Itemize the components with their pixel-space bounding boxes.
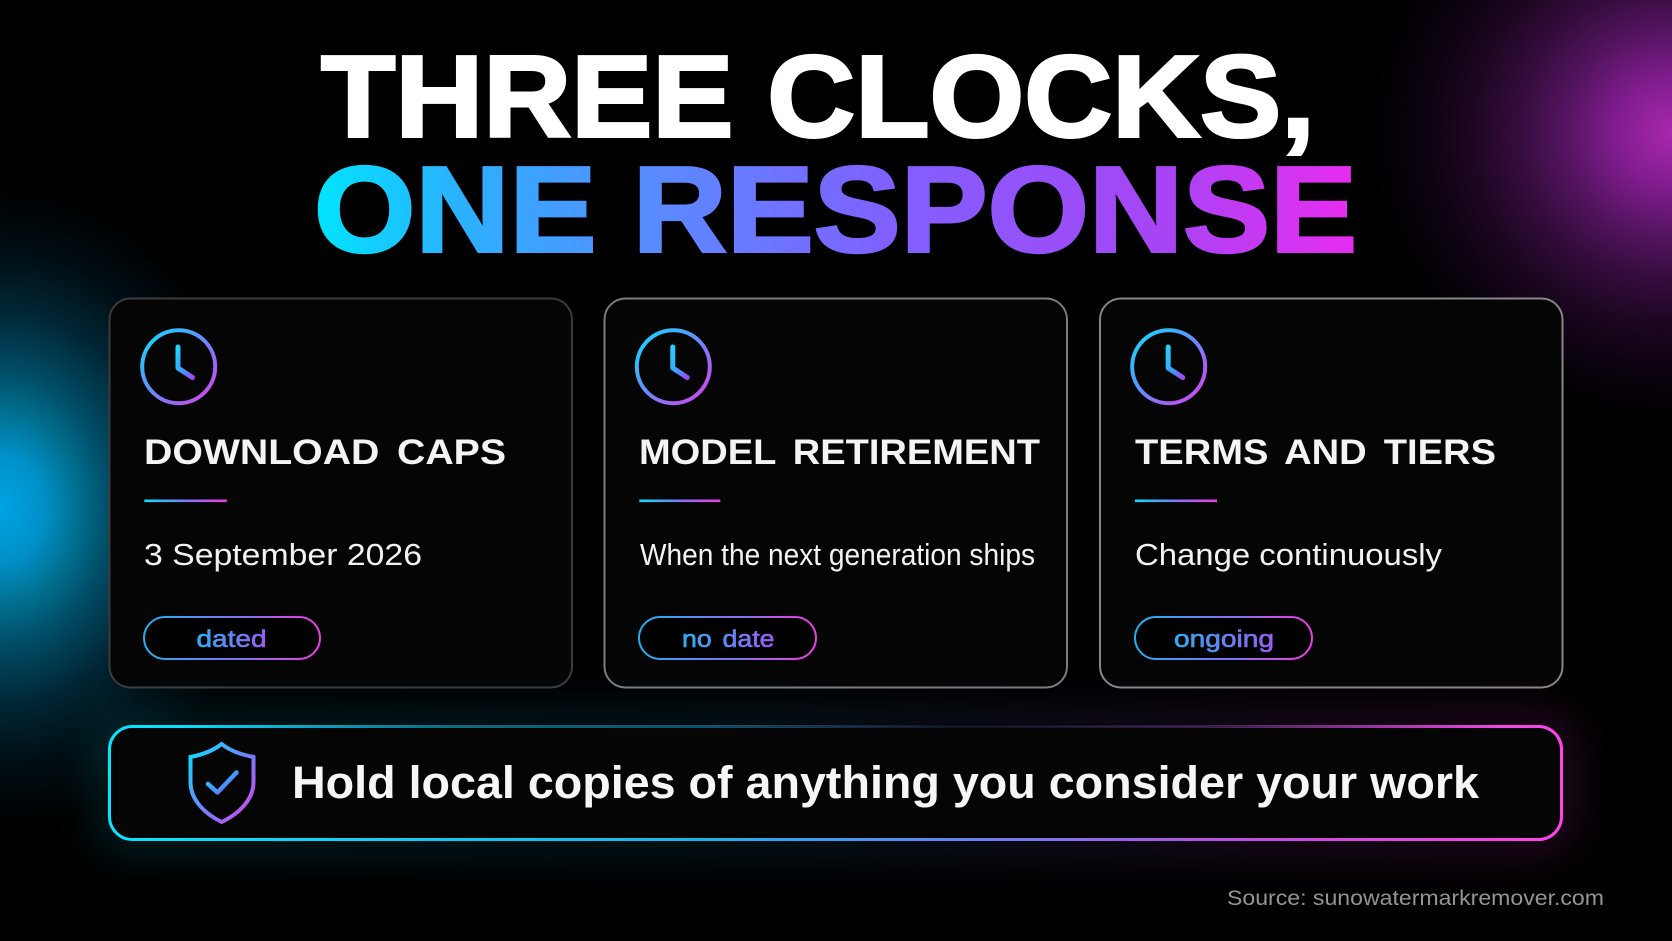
status pill: no date [639,617,816,659]
source note: Source: sunowatermarkremover.com [1227,887,1604,910]
panel: model retirement [604,298,1067,688]
title [314,32,1357,278]
icon: clock [1132,330,1205,403]
heading: TERMS AND TIERS [1135,433,1496,472]
panel: terms and tiers [1100,298,1562,688]
status pill: no date: no date [682,626,774,653]
icon: clock [637,330,710,403]
status pill: ongoing: ongoing [1174,626,1274,653]
status pill: dated [144,617,320,659]
callout text: Hold local copies of anything you consider your work [292,757,1480,808]
heading: DOWNLOAD CAPS [144,433,506,472]
divider [144,500,227,502]
heading: MODEL RETIREMENT [639,433,1040,472]
status pill: ongoing [1135,617,1312,659]
divider [1135,500,1217,502]
timing text: When the next generation ships [640,537,1035,572]
status pill: dated: dated [196,626,266,653]
icon: clock [142,330,215,403]
callout banner [108,724,1563,841]
timing text: Change continuously [1135,537,1443,572]
icon: shield [190,744,254,822]
panel: download caps [110,298,572,688]
date text: 3 September 2026 [144,537,422,572]
divider [639,500,720,502]
title: ONE RESPONSE [314,142,1357,278]
title: THREE CLOCKS, [321,32,1315,162]
